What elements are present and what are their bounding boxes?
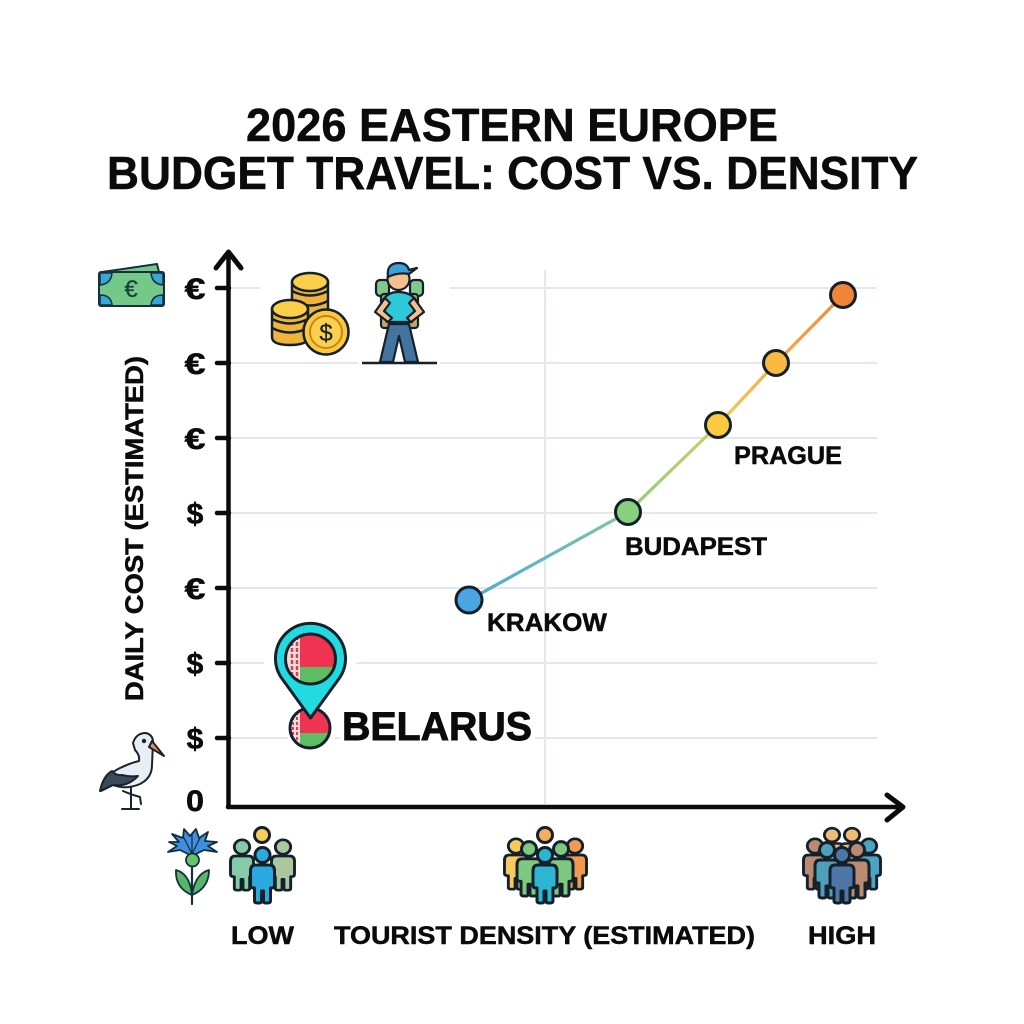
x axis label: low: LOW bbox=[231, 922, 294, 950]
icon: stork bbox=[100, 733, 164, 809]
icon: backpacker bbox=[375, 263, 424, 362]
title: BUDGET TRAVEL: COST VS. DENSITY bbox=[107, 147, 918, 199]
label: Belarus: BELARUS bbox=[342, 705, 532, 749]
icon: banknotes bbox=[99, 264, 164, 306]
y axis tick labels: € bbox=[184, 423, 206, 456]
y axis bbox=[216, 252, 241, 807]
ground line bbox=[362, 362, 437, 364]
marker: Belarus flag dot bbox=[290, 708, 330, 749]
y axis tick labels: € bbox=[184, 573, 206, 606]
y axis tick labels: € bbox=[184, 348, 206, 381]
title bbox=[107, 99, 918, 199]
y axis tick labels: $ bbox=[187, 648, 204, 681]
point: Prague bbox=[706, 412, 730, 438]
icon: medium density crowd bbox=[504, 828, 587, 903]
icon: coin stacks: $ bbox=[319, 320, 333, 347]
marker: map pin bbox=[276, 623, 346, 718]
point: upper city bbox=[764, 350, 788, 376]
y axis tick labels: 0 bbox=[186, 785, 204, 818]
icon: banknotes: € bbox=[124, 276, 138, 303]
point: top city bbox=[830, 282, 856, 308]
label: Krakow: KRAKOW bbox=[487, 609, 607, 637]
point: Budapest bbox=[616, 500, 640, 524]
x axis bbox=[228, 795, 903, 820]
x axis label: high: HIGH bbox=[808, 922, 876, 950]
icon: cornflower bbox=[168, 829, 217, 904]
chart line bbox=[469, 295, 843, 600]
y axis tick labels: € bbox=[184, 273, 206, 306]
y axis tick labels: $ bbox=[187, 498, 204, 531]
icon: high density crowd bbox=[803, 828, 881, 903]
icon: low density crowd bbox=[230, 828, 295, 903]
y axis tick labels: $ bbox=[187, 723, 204, 756]
title: 2026 EASTERN EUROPE bbox=[246, 99, 778, 151]
x axis title: TOURIST DENSITY (ESTIMATED) bbox=[334, 922, 755, 950]
point: Krakow bbox=[456, 587, 482, 613]
label: Prague: PRAGUE bbox=[734, 442, 842, 470]
y axis tick labels bbox=[184, 273, 206, 818]
label: Budapest: BUDAPEST bbox=[625, 533, 767, 561]
y axis title: DAILY COST (ESTIMATED) bbox=[121, 356, 149, 701]
icon: coin stacks bbox=[272, 273, 348, 354]
